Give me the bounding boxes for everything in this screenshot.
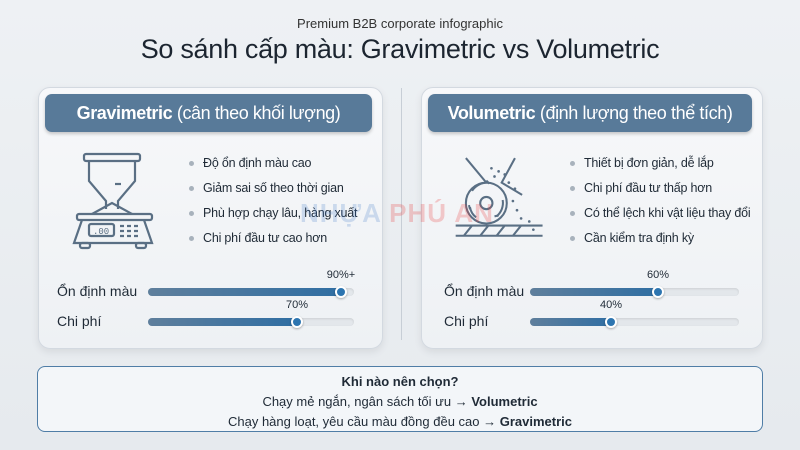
bullets: gravimetric [189,156,358,245]
header: volumetric [428,94,752,132]
label: chi phi: Chi phí [57,313,101,329]
bar: on dinh mau 90% [148,288,354,296]
panel: gravimetric: 70% [286,299,308,311]
callout: when to choose: Chạy mẻ ngắn, ngân sách tối ưu → Volumetric [262,394,538,409]
bar: on dinh mau 60% [530,288,739,296]
panel: volumetric: 40% [600,299,622,311]
panel: gravimetric [38,87,383,349]
panel: volumetric [421,87,763,349]
bar: chi phi 40% [530,318,739,326]
bullets: volumetric: Chi phí đầu tư thấp hơn [584,181,712,195]
callout: when to choose: Chạy hàng loạt, yêu cầu màu đồng đều cao → Gravimetric [228,414,572,429]
icon: scale with hopper [72,152,154,250]
bullets: volumetric: Thiết bị đơn giản, dễ lắp [584,156,714,170]
title: So sánh cấp màu: Gravimetric vs Volumetric [141,34,659,64]
callout: when to choose: Khi nào nên chọn? [342,374,458,389]
label: on dinh mau: Ổn định màu [444,283,524,299]
bullets: gravimetric: Phù hợp chạy lâu, hàng xuất [203,206,357,220]
callout: when to choose [37,366,763,432]
label: chi phi: Chi phí [444,313,488,329]
bullets: gravimetric: Độ ổn định màu cao [203,156,311,170]
bullets: gravimetric: Chi phí đầu tư cao hơn [203,231,327,245]
bullets: volumetric [570,156,750,245]
bar: chi phi 70% [148,318,354,326]
subtitle: Premium B2B corporate infographic [297,16,503,31]
header: volumetric: Volumetric (định lượng theo thể tích) [448,103,732,123]
bullets: gravimetric: Giảm sai số theo thời gian [203,181,344,195]
header: gravimetric [45,94,372,132]
icon: scale with hopper: .00 [93,227,109,237]
bullets: volumetric: Cần kiểm tra định kỳ [584,231,694,245]
watermark: NHỰA PHÚ AN [300,198,494,228]
panel: volumetric: 60% [647,269,669,281]
icon: volumetric rotor feeder [456,157,543,237]
panel: gravimetric: 90%+ [327,269,355,281]
bullets: volumetric: Có thể lệch khi vật liệu thay đổi [584,206,750,220]
header: gravimetric: Gravimetric (cân theo khối lượng) [77,103,340,123]
label: on dinh mau: Ổn định màu [57,283,137,299]
